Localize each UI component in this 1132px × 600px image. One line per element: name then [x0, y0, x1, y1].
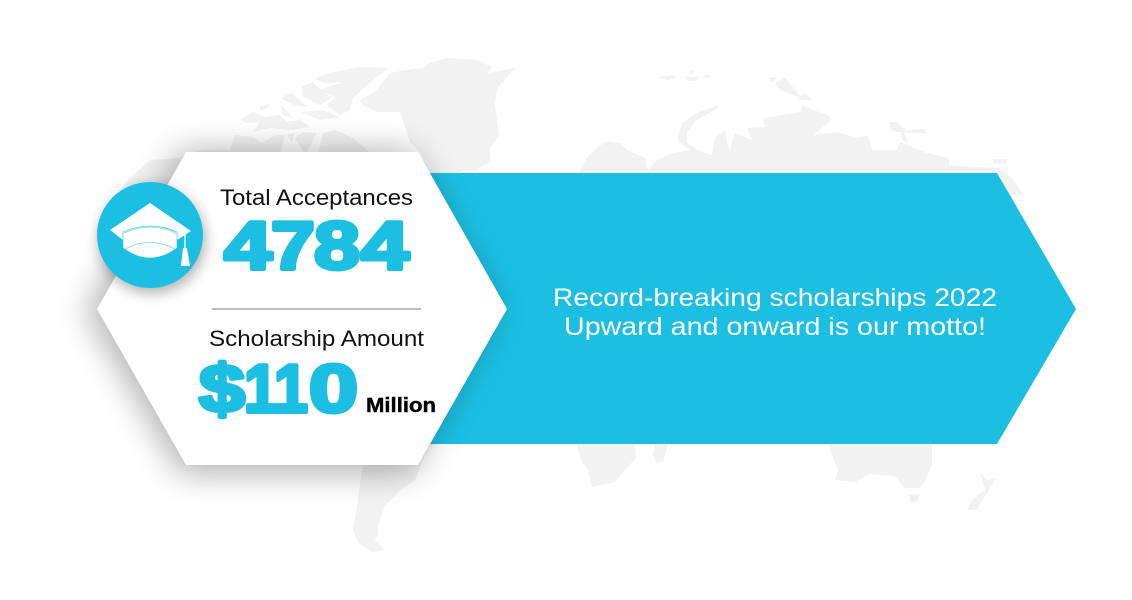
number: 4784: 7 [271, 208, 315, 284]
white hexagon panel [97, 152, 507, 465]
number: $110: 1 [274, 351, 308, 427]
number: 4784: 8 [314, 208, 360, 284]
unit: million: Million [366, 395, 436, 417]
world map background [120, 58, 1024, 552]
number: 4784 [224, 208, 409, 284]
number: $110: $ [199, 351, 245, 427]
number: $110 [199, 351, 358, 427]
hexagon shadow [86, 150, 497, 474]
number: 4784: 4 [224, 208, 272, 284]
icon: graduation cap [97, 182, 203, 288]
heading: scholarship amount: Scholarship Amount [209, 326, 424, 351]
divider [212, 308, 421, 310]
number: $110: 1 [244, 351, 278, 427]
number: $110: 0 [309, 351, 358, 427]
heading: total acceptances: Total Acceptances [220, 185, 413, 210]
banner message: Record-breaking scholarships 2022 [553, 284, 997, 312]
banner message [553, 284, 997, 341]
circle shadow [99, 187, 205, 293]
banner message: Upward and onward is our motto! [564, 313, 986, 341]
number: 4784: 4 [361, 208, 409, 284]
blue arrow banner [420, 173, 1076, 444]
